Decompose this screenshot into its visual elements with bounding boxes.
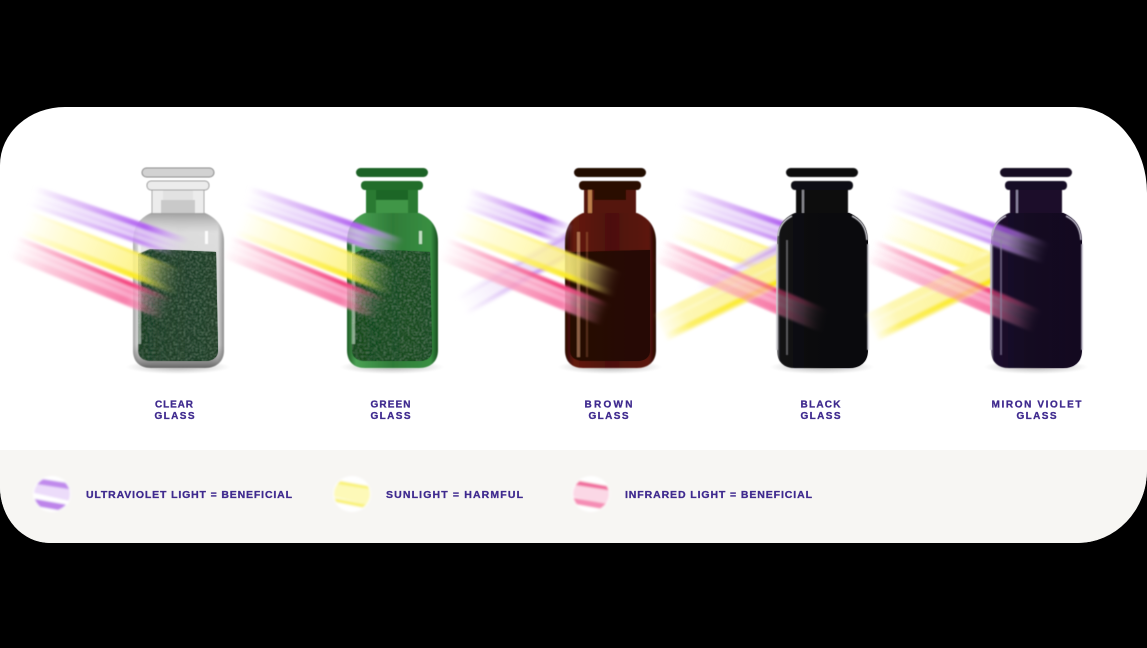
legend: ultraviolet <box>30 476 293 513</box>
incident sunlight beam <box>671 213 801 284</box>
label: GLASS <box>1016 411 1057 422</box>
green bottle <box>340 168 444 374</box>
miron bottle <box>984 168 1088 374</box>
ultraviolet beam <box>29 186 189 260</box>
panel: miron violet glass <box>866 168 1088 422</box>
sunlight beam <box>21 211 187 295</box>
bottle highlights <box>991 216 1082 355</box>
reflected ultraviolet beam <box>695 241 793 306</box>
panel: clear glass <box>9 168 230 422</box>
bottle fade <box>777 213 868 368</box>
label: GLASS <box>800 411 841 422</box>
label: BLACK <box>800 400 841 410</box>
contents fade <box>138 249 218 361</box>
contents fade <box>352 249 432 361</box>
bottle fade <box>991 213 1082 368</box>
reflected sunlight beam <box>655 253 794 341</box>
legend: sunlight <box>330 476 524 512</box>
brown bottle <box>558 168 662 374</box>
icon: sunlight swatch <box>334 476 370 512</box>
label: GLASS <box>370 411 411 422</box>
ultraviolet beam <box>243 186 403 260</box>
clear bottle <box>126 168 230 374</box>
sunlight beam <box>453 211 623 297</box>
infrared beam <box>223 236 388 321</box>
label <box>584 400 632 422</box>
legend band <box>0 450 1147 543</box>
label <box>154 400 195 422</box>
incident infrared beam <box>867 240 1042 332</box>
reflected sunlight beam <box>866 253 1005 341</box>
ultraviolet beam <box>462 188 573 246</box>
contents fade <box>570 250 650 361</box>
black bottle <box>770 168 874 374</box>
label <box>992 400 1082 422</box>
label: GLASS <box>588 411 629 422</box>
label <box>370 400 411 422</box>
bottle highlights <box>777 216 868 355</box>
label: MIRON VIOLET <box>992 400 1082 410</box>
incident infrared beam <box>655 240 832 333</box>
legend text: SUNLIGHT = HARMFUL <box>386 489 524 501</box>
white panel <box>0 107 1147 543</box>
legend: infrared <box>569 476 813 512</box>
icon: infrared swatch <box>573 476 610 512</box>
panel: brown glass <box>439 168 662 422</box>
ultraviolet beam <box>888 187 1051 264</box>
incident sunlight beam <box>881 213 1011 284</box>
panel: green glass <box>223 168 444 422</box>
label: CLEAR <box>155 400 194 410</box>
label: BROWN <box>584 400 632 410</box>
reflected ultraviolet beam <box>455 231 580 317</box>
label: GREEN <box>370 400 410 410</box>
legend text: ULTRAVIOLET LIGHT = BENEFICIAL <box>86 489 293 501</box>
sunlight beam <box>235 211 401 295</box>
panel: black glass <box>655 168 874 422</box>
infrared beam inside bottle <box>655 240 832 333</box>
incident ultraviolet beam <box>677 187 826 257</box>
icon: ultraviolet swatch <box>34 476 70 512</box>
infrared beam inside bottle <box>867 240 1042 332</box>
infrared beam <box>9 236 174 321</box>
infrared beam <box>439 238 609 325</box>
label: GLASS <box>154 411 195 422</box>
legend text: INFRARED LIGHT = BENEFICIAL <box>625 489 813 501</box>
label <box>800 400 841 422</box>
